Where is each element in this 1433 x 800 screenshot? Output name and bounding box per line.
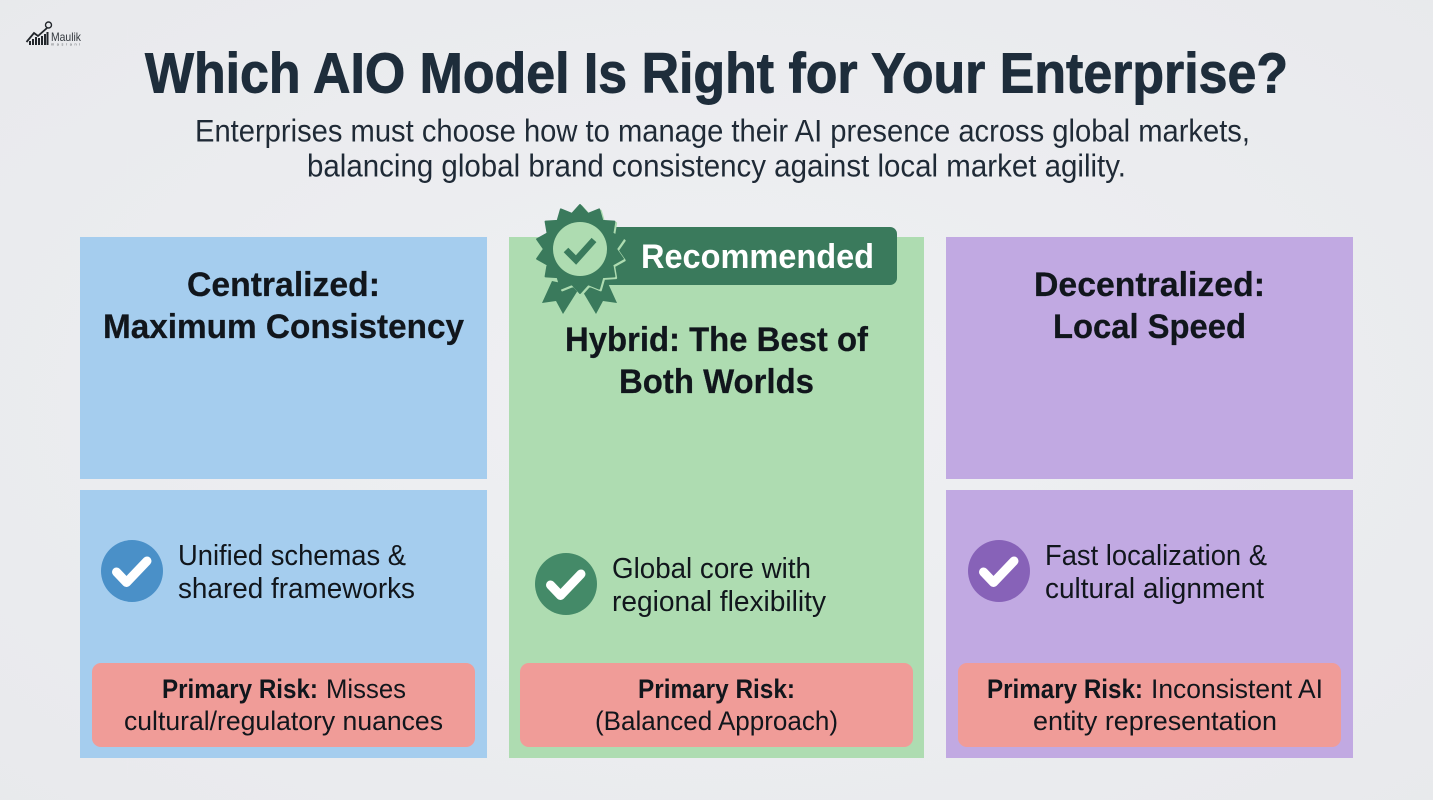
centralized benefit: Unified schemas & [178,540,406,572]
centralized risk: cultural/regulatory nuances [124,706,443,736]
decentralized benefit: cultural alignment [1045,573,1264,605]
hybrid risk [520,663,913,747]
panel: centralized [80,237,487,758]
decentralized header panel [946,237,1353,479]
decentralized risk: entity representation [1033,706,1277,736]
centralized benefit: shared frameworks [178,573,415,605]
logo: Maulik Masrani: Maulik [51,30,82,44]
centralized header panel: Maximum Consistency [103,308,464,346]
logo: Maulik Masrani [26,22,82,46]
hybrid risk: Primary Risk: [638,674,795,704]
hybrid benefit [612,553,826,618]
centralized header panel [80,237,487,479]
icon: green check [535,553,597,615]
panel: hybrid [509,205,924,758]
decentralized risk: Inconsistent AI [1151,674,1323,704]
hybrid risk: (Balanced Approach) [595,706,838,736]
centralized risk [92,663,475,747]
hybrid background [509,237,924,758]
centralized header panel: Centralized: [187,266,380,304]
hybrid heading: Both Worlds [619,363,814,401]
subtitle: balancing global brand consistency against local market agility. [307,148,1126,184]
recommended banner: Recommended [641,238,874,276]
icon: award badge [537,205,624,314]
decentralized risk: Primary Risk: [987,674,1143,704]
recommended banner [600,227,897,285]
decentralized benefit [1045,540,1267,605]
logo: Maulik Masrani: masrani [51,42,80,46]
icon: purple check [968,540,1030,602]
subtitle: Enterprises must choose how to manage their AI presence across global markets, [195,112,1250,148]
centralized risk: Primary Risk: [162,674,318,704]
centralized benefit [178,540,415,605]
centralized risk: Misses [326,674,406,704]
decentralized header panel: Local Speed [1053,308,1246,346]
title: Which AIO Model Is Right for Your Enterprise? [145,42,1288,104]
decentralized header panel: Decentralized: [1034,266,1265,304]
decentralized risk [958,663,1341,747]
decentralized benefit: Fast localization & [1045,540,1267,572]
panel: decentralized [946,237,1353,758]
hybrid heading [565,321,868,401]
subtitle [195,112,1250,184]
hybrid benefit: Global core with [612,553,811,585]
hybrid heading: Hybrid: The Best of [565,321,868,359]
centralized detail panel [80,490,487,758]
hybrid benefit: regional flexibility [612,586,826,618]
icon: blue check [101,540,163,602]
decentralized detail panel [946,490,1353,758]
